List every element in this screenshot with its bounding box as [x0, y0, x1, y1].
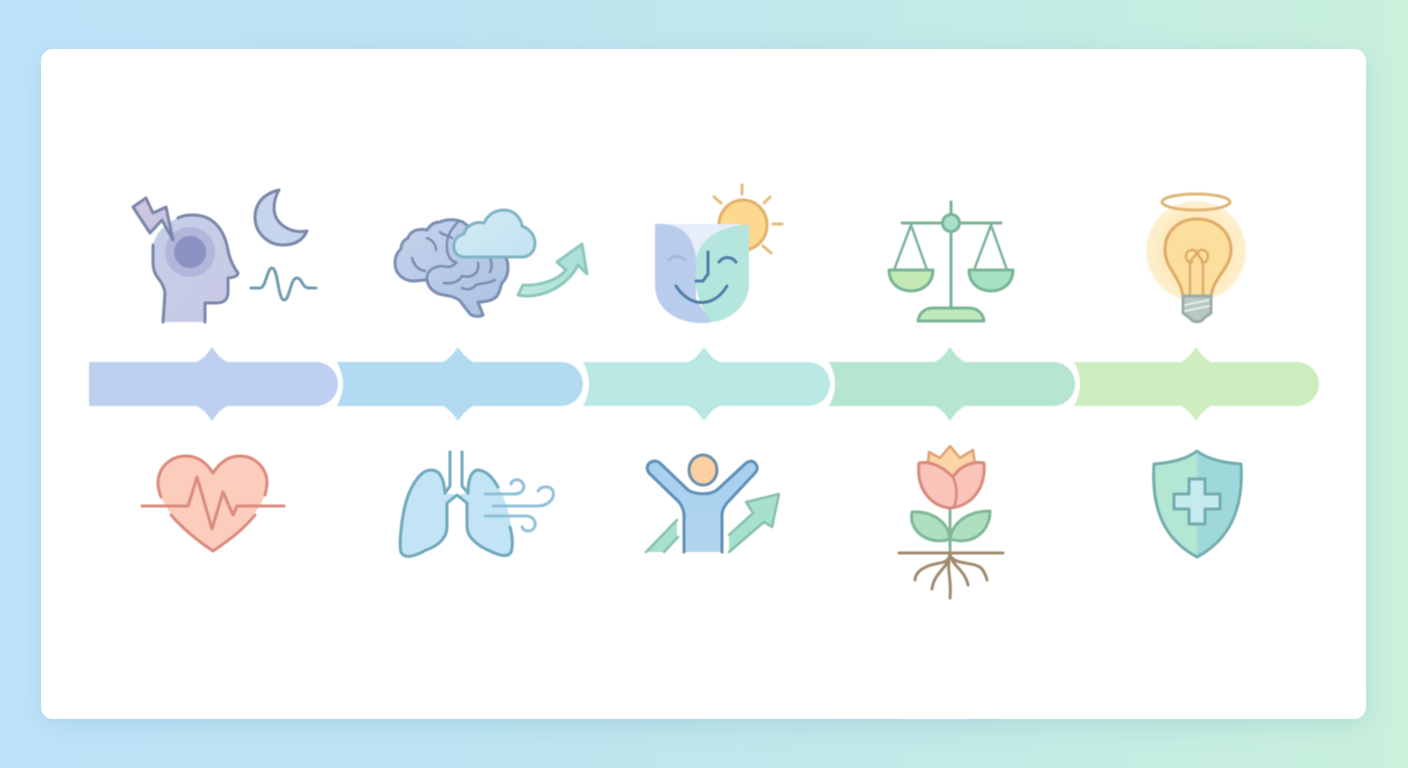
icon: flower with roots — [899, 446, 1003, 598]
base — [918, 308, 984, 321]
filament — [1186, 250, 1208, 296]
segment 2 — [337, 347, 583, 421]
head — [689, 455, 717, 485]
glow — [1146, 201, 1246, 301]
icon: brain with cloud and rising arrow — [395, 210, 587, 316]
icon: lungs with wind — [400, 452, 553, 556]
right pan — [969, 270, 1013, 291]
pulse line — [142, 477, 284, 529]
screw base — [1183, 296, 1211, 322]
icon: shield with cross — [1154, 451, 1241, 557]
brain — [395, 220, 508, 316]
lungs — [400, 470, 512, 556]
halo — [1162, 194, 1230, 210]
segment 3 — [583, 347, 830, 421]
icon: smiling face with sun — [655, 185, 782, 323]
segment 4 — [829, 347, 1075, 421]
left arrow — [646, 520, 678, 552]
face — [655, 224, 749, 323]
wave — [251, 268, 316, 300]
ground — [899, 552, 1003, 554]
shield — [1154, 451, 1241, 557]
leaves — [912, 512, 950, 541]
strings — [894, 225, 1007, 270]
bulb glass — [1165, 219, 1231, 296]
sun — [714, 185, 782, 253]
stem — [948, 505, 952, 553]
trachea — [445, 452, 468, 493]
pivot — [942, 214, 960, 232]
icon: head with headache, moon and wave — [133, 190, 316, 322]
cross — [1174, 479, 1220, 524]
cloud — [454, 210, 535, 257]
roots — [915, 554, 987, 598]
back petals — [928, 446, 975, 480]
head — [153, 215, 238, 322]
right arrow — [729, 494, 779, 552]
icon: person with raised arms and arrows — [646, 455, 779, 552]
icon: balance scale — [889, 202, 1013, 321]
icon: glowing light bulb with halo — [1146, 194, 1246, 322]
moon — [255, 190, 307, 245]
timeline bar — [89, 347, 1319, 421]
rising arrow — [518, 244, 587, 296]
heart — [158, 456, 267, 551]
icon: heart with pulse — [142, 456, 284, 551]
body — [647, 461, 757, 552]
beam and post — [902, 202, 1001, 308]
segment 5 — [1074, 347, 1319, 421]
bloom — [919, 463, 984, 508]
wind — [485, 480, 553, 531]
lightning bolt — [133, 198, 173, 240]
segment 1 — [89, 347, 338, 421]
left pan — [889, 270, 933, 291]
